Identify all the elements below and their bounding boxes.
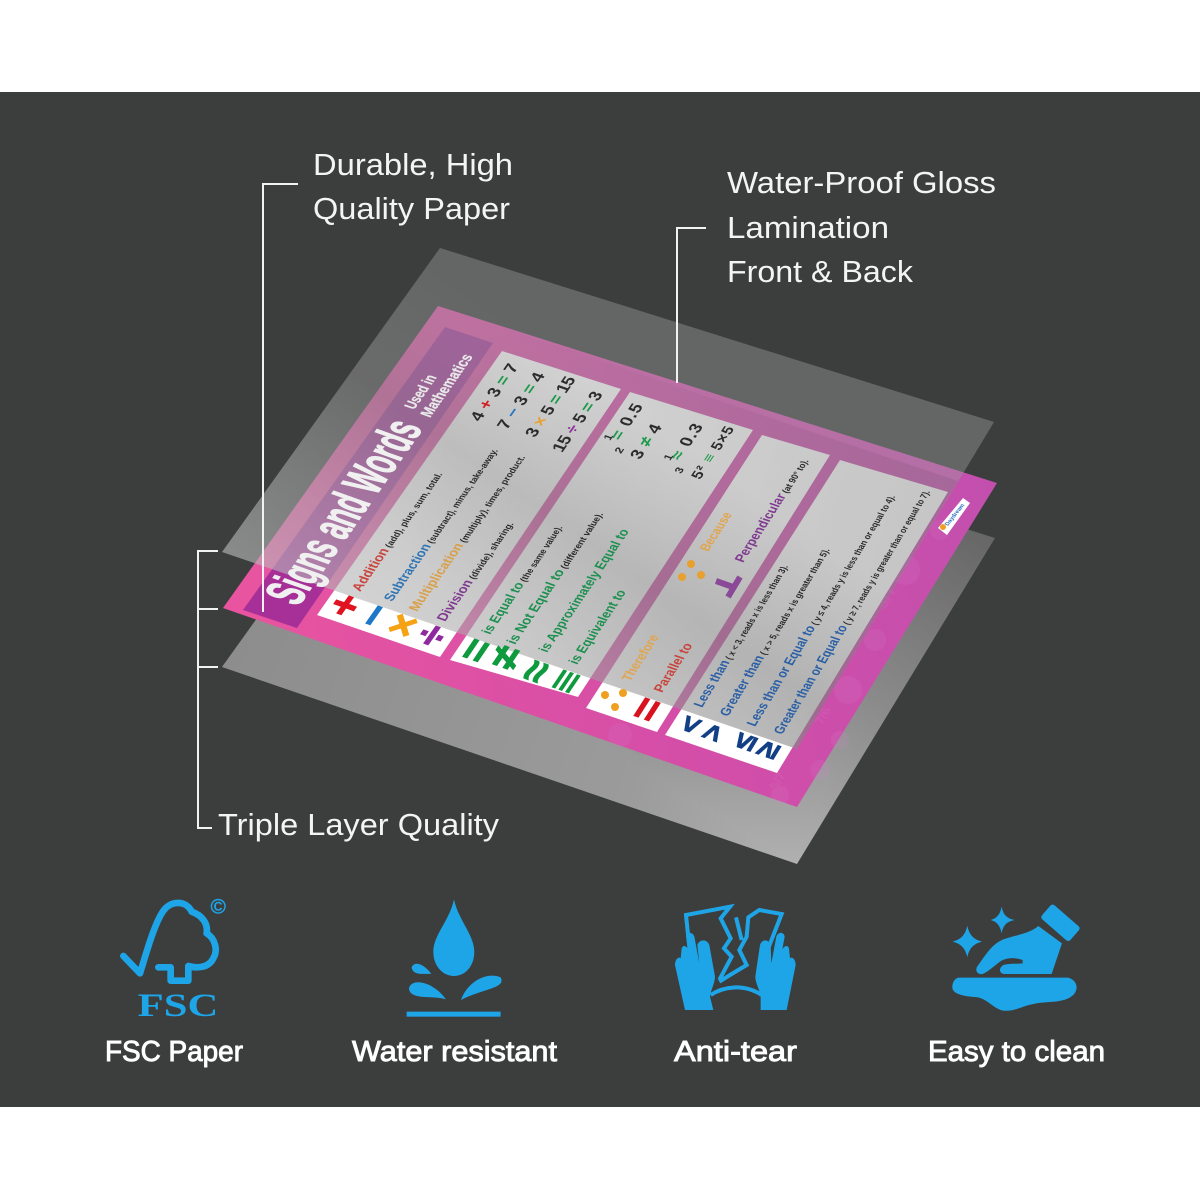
poster title [253,352,477,611]
panel 1: operations: 7 − 3 = 4 [493,370,550,431]
icon: FSC tree: © [211,895,226,918]
because dots [678,560,705,581]
panel 2: equality [447,401,738,699]
publisher logo [938,498,970,535]
panel 3: logic symbols: Parallel to [650,641,696,694]
poster title: Used in [402,373,441,411]
poster title: Signs and Words [253,412,434,611]
equations with fractions: 2 [613,446,627,455]
icon: anti-tear [675,907,796,1010]
equations with fractions [602,401,738,481]
bracket: triple layer [198,551,218,828]
label: Easy to clean: Easy to clean [928,1036,1105,1068]
panel 2: equality: ≡ [537,663,594,699]
equations with fractions: 1 [662,453,676,462]
poster mottled background [608,520,950,804]
panel 1: operations: Addition (add), plus, sum, total. [348,470,445,593]
panel 3 card [586,435,830,732]
panel 4: inequalities: ≥ [748,737,788,762]
leader line: lamination [677,228,706,383]
publisher logo: Daydream [944,503,967,527]
panel 4: inequalities: > [693,720,733,746]
therefore dots [601,689,627,711]
panel 2: equality: ≠ [477,640,534,675]
top laminate sheet [222,248,994,749]
perpendicular symbol [716,577,740,597]
icon: easy to clean [952,903,1081,1011]
panel 1 card [317,351,621,657]
label: triple layer: Triple Layer Quality [218,807,500,842]
icon: FSC tree [123,895,226,1024]
label: durable paper: Quality Paper [313,191,510,226]
panel 2: equality: ≈ [507,654,564,689]
panel 2: equality: = [447,632,504,668]
panel 1: operations: Subtraction (subtract), minus, take-away. [380,446,501,603]
panel 2: equality: is Not Equal to (different value). [503,510,606,646]
label: durable paper: Durable, High [313,147,513,182]
panel 4: inequalities: < [671,712,711,738]
panel 4: inequalities: Less than or Equal to ( y ≤ 4, reads y is less than or equal to 4). [743,492,898,728]
panel 3: logic symbols [601,456,812,727]
equations with fractions: = 0.5 [606,401,647,442]
leader line: paper [263,184,298,612]
poster mottled background: 5/7 [870,583,902,611]
poster mottled background: 7/6 [811,706,834,726]
panel 4: inequalities: ≤ [725,729,765,754]
panel 3: logic symbols: = [618,691,675,727]
panel 4: inequalities: Less than ( x < 3, reads x is less than 3). [690,562,791,709]
panel 1: operations: Division (divide), sharing. [433,519,517,623]
panel 1: operations: 15 ÷ 5 = 3 [548,389,607,454]
label: water-proof lamination: Front & Back [727,254,914,289]
panel 4: inequalities [671,487,933,762]
label: water-proof lamination [727,165,996,289]
icon: water drop [407,899,502,1017]
equations with fractions: 1 [602,433,616,442]
label: water-proof lamination: Lamination [727,210,889,245]
equations with fractions: 3 [673,466,687,475]
panel 1: operations: + [315,587,373,623]
panel 4: inequalities: Greater than ( x > 5, reads x is greater than 5). [716,545,833,718]
poster mottled background: 5/7 [766,771,789,791]
panel 4 card [665,460,948,773]
icon: FSC tree: FSC [138,988,218,1024]
panel 2: equality: is Equivalent to [565,588,629,666]
panel 1: operations [315,361,607,652]
panel 1: operations: − [344,597,402,633]
poster sheet [223,306,997,807]
panel 2: equality: is Equal to (the same value). [478,523,566,636]
panel 1: operations: 4 + 3 = 7 [466,361,523,423]
panel 3: logic symbols: Therefore [618,632,662,683]
panel 2 card [450,392,753,697]
label: Anti-tear: Anti-tear [674,1036,797,1068]
panel 4: inequalities: Greater than or Equal to ( y ≥ 7, reads y is greater than or equal to 7). [770,487,933,736]
panel 1: operations: 3 × 5 = 15 [521,374,580,439]
poster title: Mathematics [418,352,477,419]
label: FSC Paper: FSC Paper [105,1036,243,1068]
equations with fractions: 5² ≡ 5×5 [689,425,738,481]
panel 3: logic symbols: Perpendicular (at 90° to). [731,456,812,564]
label: water-proof lamination: Water-Proof Gloss [727,165,996,200]
panel 1: operations: × [373,607,431,643]
label: Water resistant: Water resistant [352,1036,557,1068]
equations with fractions: 3 ≠ 4 [626,421,666,461]
label: durable paper [313,147,513,226]
panel 1: operations: ÷ [403,618,460,652]
bottom laminate sheet [222,363,995,864]
panel 1: operations: Multiplication (multiply), times, product. [405,453,528,613]
panel 2: equality: is Approximately Equal to [535,527,632,654]
poster base: Signs and Words [223,306,997,807]
panel 3: logic symbols: Because [696,510,735,553]
equations with fractions: ≈ 0.3 [666,421,707,462]
title band [243,327,493,628]
